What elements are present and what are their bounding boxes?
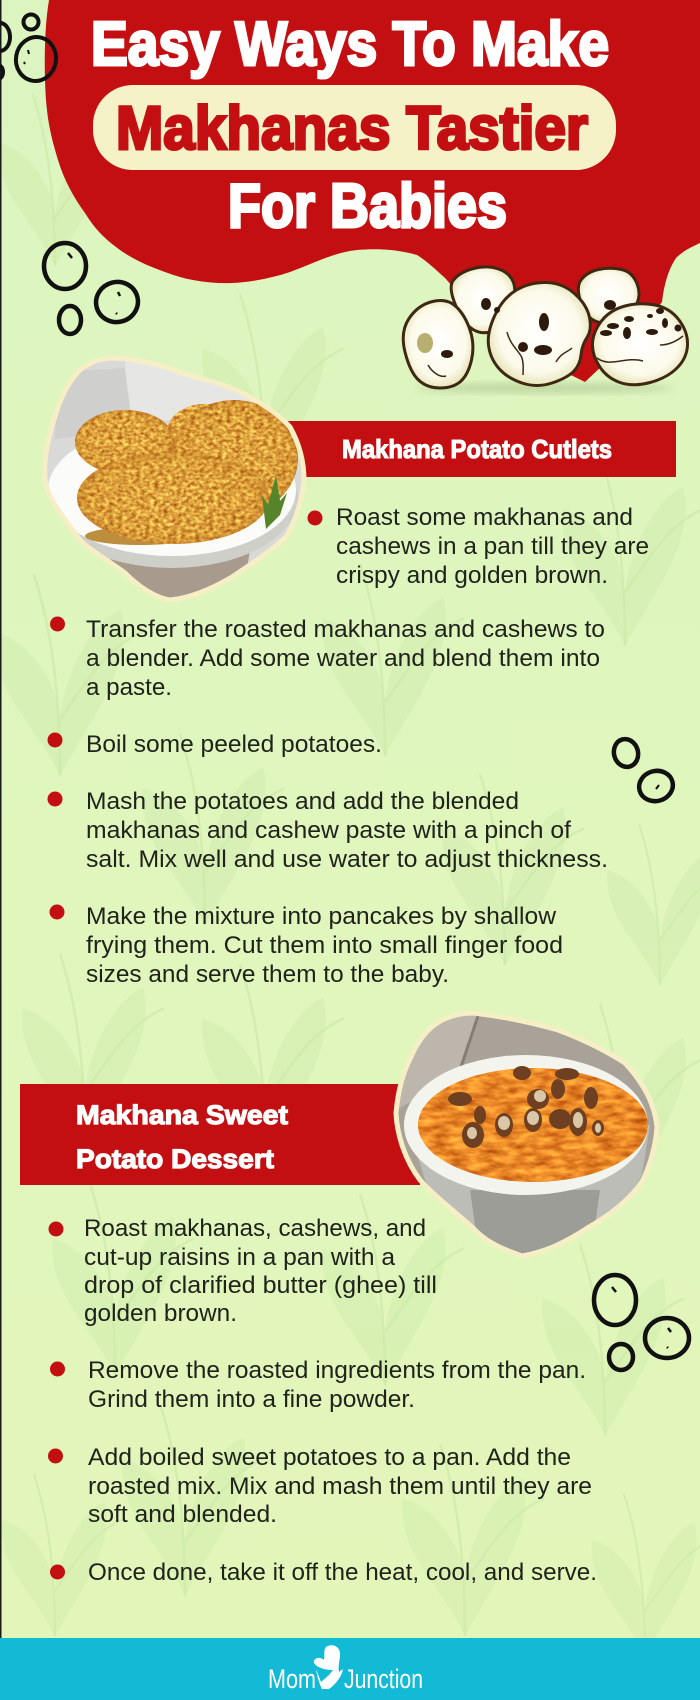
heading bar: Potato Dessert: [76, 1144, 274, 1174]
panel: makhana potato cutlets: [40, 355, 676, 988]
logo: MomJunction: [268, 1645, 423, 1694]
doodle circles top left: [0, 14, 60, 84]
bullet 1: drop of clarified butter (ghee) till: [84, 1272, 437, 1299]
bullet 2: Transfer the roasted makhanas and cashews to: [86, 616, 605, 643]
logo: MomJunction: Mom: [268, 1664, 316, 1694]
makhana shadow: [415, 383, 675, 393]
bullet 2: [50, 616, 605, 701]
makhana left: [403, 300, 473, 388]
bullet 1: crispy and golden brown.: [336, 562, 608, 589]
bullet 5: sizes and serve them to the baby.: [86, 961, 449, 988]
doodle circles right: [611, 736, 676, 805]
bullet 1: Roast makhanas, cashews, and: [84, 1215, 426, 1242]
title line 1: Easy Ways To Make: [91, 10, 609, 79]
heading bar: Makhana Potato Cutlets: [342, 434, 612, 464]
bullet 4: Once done, take it off the heat, cool, and serve.: [88, 1559, 597, 1586]
logo: MomJunction: Junction: [344, 1664, 423, 1694]
makhana seed marks: [417, 298, 682, 358]
heading bar: [286, 421, 676, 477]
bullet 5: Make the mixture into pancakes by shallow: [86, 903, 557, 930]
doodle circles lower right: [594, 1275, 689, 1370]
bullet 1: golden brown.: [84, 1300, 237, 1327]
heading bar: Makhana Sweet: [76, 1100, 288, 1130]
bullet 5: frying them. Cut them into small finger food: [86, 932, 563, 959]
bullet 4: Mash the potatoes and add the blended: [86, 788, 519, 815]
bullet 2: [50, 1357, 586, 1413]
title line 3: For Babies: [228, 172, 507, 241]
footer: [0, 1638, 700, 1700]
panel: makhana sweet potato dessert: [20, 1010, 660, 1586]
title: [91, 10, 616, 241]
bullet 3: [48, 1444, 592, 1528]
bullet 3: Add boiled sweet potatoes to a pan. Add the: [88, 1444, 571, 1471]
bullet 5: [50, 903, 563, 988]
bullet 3: roasted mix. Mix and mash them until they are: [88, 1473, 592, 1500]
heading bar: [20, 1084, 420, 1185]
icon: makhana seeds: [403, 267, 688, 393]
bullet 1: [48, 1215, 437, 1327]
bullet 1: cashews in a pan till they are: [336, 533, 649, 560]
bullet 1: Roast some makhanas and: [336, 504, 633, 531]
bullet 1: cut-up raisins in a pan with a: [84, 1244, 396, 1271]
title pill: [93, 85, 616, 170]
bullet 1: [308, 504, 649, 589]
bullet 2: Grind them into a fine powder.: [88, 1386, 415, 1413]
doodle circles left: [44, 243, 142, 334]
header red blob: [45, 0, 700, 382]
bullet 4: [48, 788, 608, 873]
bullet 4: salt. Mix well and use water to adjust thickness.: [86, 846, 608, 873]
bullet 3: soft and blended.: [88, 1501, 277, 1528]
title line 2: Makhanas Tastier: [116, 94, 588, 162]
bullet 2: a blender. Add some water and blend them into: [86, 645, 600, 672]
makhana center: [488, 282, 590, 386]
photo: potato cutlets: [40, 355, 310, 610]
makhana back right: [578, 268, 639, 323]
bullet 4: makhanas and cashew paste with a pinch of: [86, 817, 571, 844]
makhana right: [592, 304, 688, 385]
bullet 2: a paste.: [86, 674, 172, 701]
bullet 2: Remove the roasted ingredients from the pan.: [88, 1357, 586, 1384]
photo: sweet potato dessert: [390, 1010, 660, 1260]
makhana back left: [451, 267, 515, 333]
bullet 3: Boil some peeled potatoes.: [86, 731, 382, 758]
